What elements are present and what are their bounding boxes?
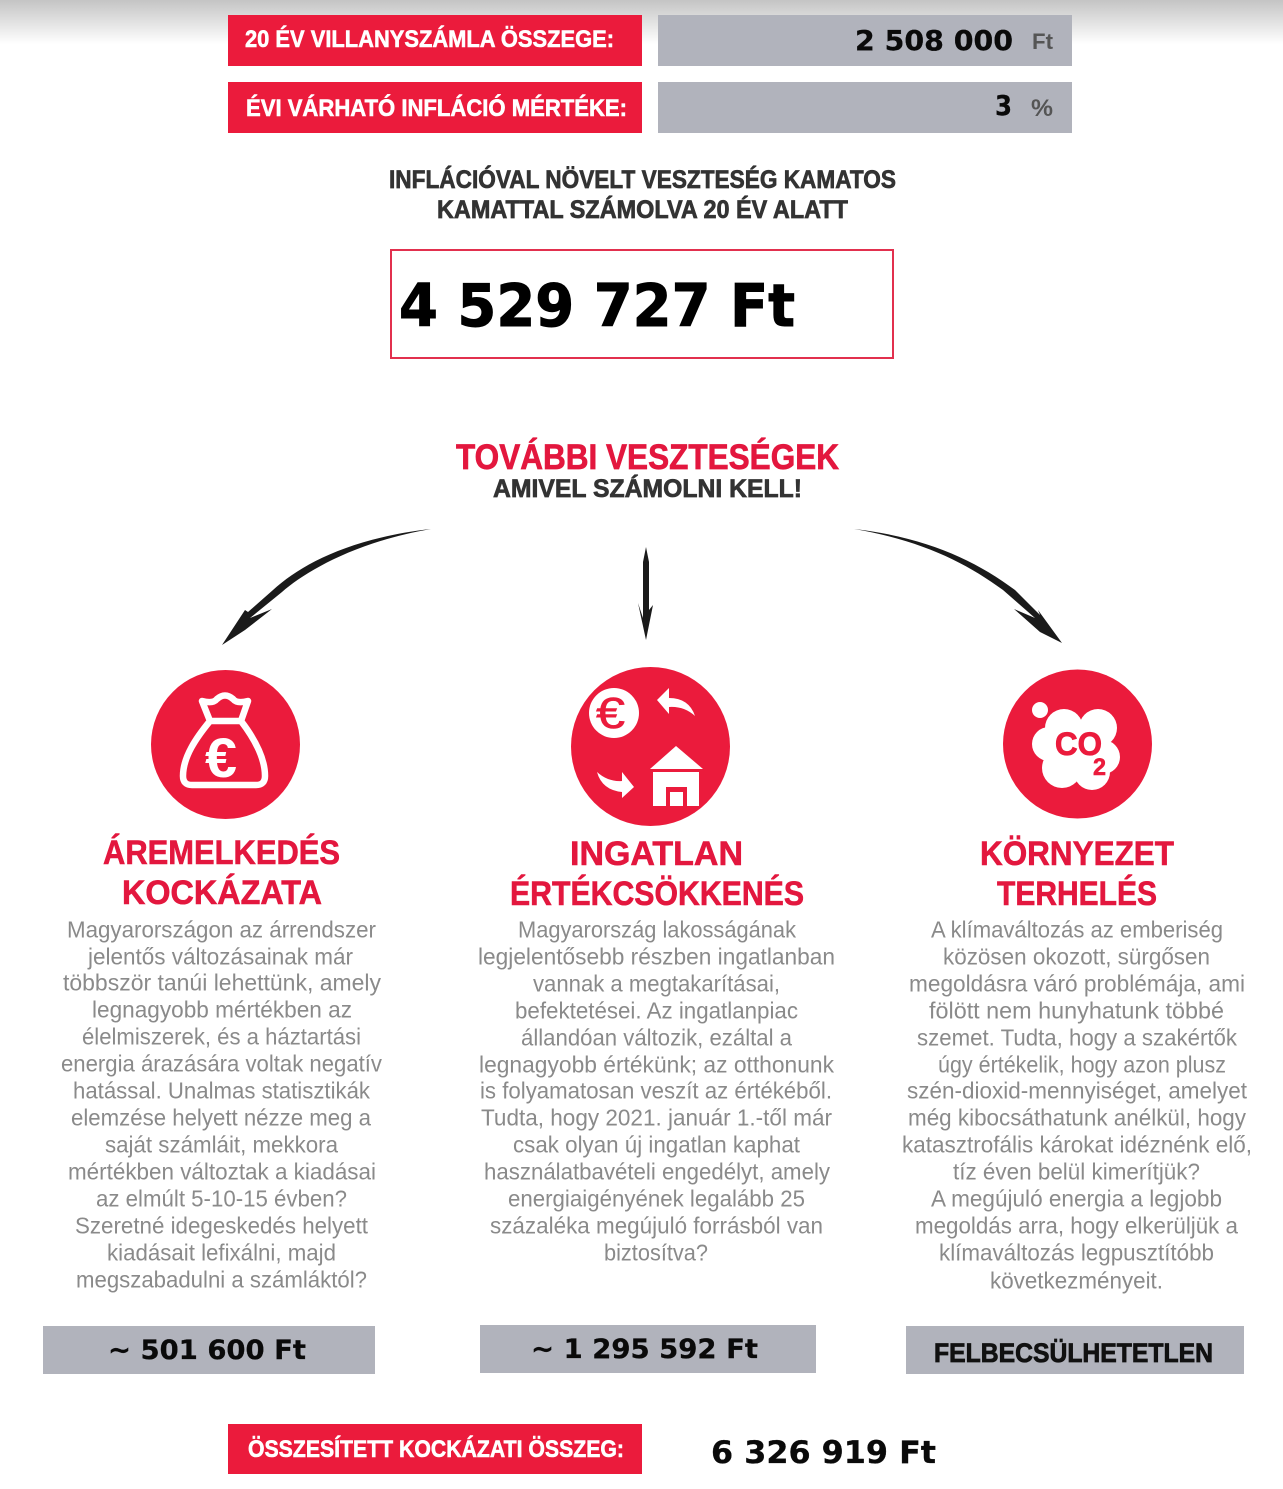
icon: money bag: € <box>205 726 237 789</box>
label: bill total: 20 ÉV VILLANYSZÁMLA ÖSSZEGE: <box>245 25 614 53</box>
heading: further losses <box>456 437 839 503</box>
heading: inflation-adjusted loss: KAMATTAL SZÁMOLVA 20 ÉV ALATT <box>437 195 848 224</box>
icon: property and euro exchange: € <box>596 689 625 738</box>
body text: saját számláit, mekkora <box>105 1132 339 1158</box>
value: inflation <box>658 82 1072 133</box>
body text: megoldás arra, hogy elkerüljük a <box>915 1212 1239 1238</box>
body text: katasztrofális károkat idéznénk elő, <box>902 1132 1252 1158</box>
row: 20 year electricity bill total <box>228 15 1072 66</box>
body text: energia árazására voltak negatív <box>61 1050 382 1076</box>
column: price rise risk <box>43 670 382 1374</box>
label: bill total <box>228 15 642 66</box>
arrow: centre <box>638 547 653 640</box>
body text: közösen okozott, sürgősen <box>943 944 1210 970</box>
value bar: ~ 501 600 Ft <box>108 1335 306 1366</box>
value bar: ~ 1 295 592 Ft <box>531 1334 758 1365</box>
body text: kiadásait lefixálni, majd <box>107 1240 336 1266</box>
column: environmental burden <box>902 670 1252 1374</box>
row: combined risk total <box>228 1424 936 1474</box>
body text: legnagyobb értékünk; az otthonunk <box>479 1052 834 1078</box>
value: bill total: 2 508 000 <box>855 24 1013 57</box>
value bar <box>43 1326 375 1374</box>
result box: total loss <box>391 250 893 358</box>
body text: Szeretné idegeskedés helyett <box>75 1212 368 1238</box>
body text: legjelentősebb részben ingatlanban <box>478 944 835 970</box>
icon: property and euro exchange <box>571 667 730 826</box>
arrow: left <box>222 529 431 645</box>
body text: úgy értékelik, hogy azon plusz <box>938 1052 1226 1078</box>
icon: CO2 cloud: CO <box>1055 726 1102 762</box>
body text: következményeit. <box>990 1268 1163 1294</box>
body text: is folyamatosan veszít az értékéből. <box>480 1078 832 1104</box>
icon: money bag <box>151 670 300 819</box>
body text: állandóan változik, ezáltal a <box>521 1024 793 1050</box>
label: inflation: ÉVI VÁRHATÓ INFLÁCIÓ MÉRTÉKE: <box>246 94 627 122</box>
body text: szén-dioxid-mennyiséget, amelyet <box>907 1078 1247 1104</box>
value: bill total: Ft <box>1032 29 1054 54</box>
arrow: right <box>854 529 1062 643</box>
body text: fölött nem hunyhatunk többé <box>929 998 1224 1024</box>
body text: megoldásra váró problémája, ami <box>909 970 1245 996</box>
value: inflation: % <box>1031 95 1053 122</box>
body text <box>902 916 1252 1294</box>
icon: CO2 cloud: 2 <box>1093 754 1106 781</box>
body text: Tudta, hogy 2021. január 1.-től már <box>481 1104 832 1130</box>
column: property value loss <box>478 667 835 1373</box>
body text: mértékben változtak a kiadásai <box>68 1158 376 1184</box>
value bar: FELBECSÜLHETETLEN <box>934 1338 1213 1368</box>
body text: százaléka megújuló forrásból van <box>490 1212 823 1238</box>
body text <box>61 916 382 1292</box>
body text: még kibocsáthatunk anélkül, hogy <box>908 1104 1246 1130</box>
heading: further losses: AMIVEL SZÁMOLNI KELL! <box>493 474 802 503</box>
label: combined risk: ÖSSZESÍTETT KOCKÁZATI ÖSSZEG: <box>248 1435 624 1463</box>
label: inflation <box>228 82 642 133</box>
value bar <box>906 1326 1244 1374</box>
result box: total loss: 4 529 727 Ft <box>399 271 795 340</box>
body text: legnagyobb mértékben az <box>92 996 352 1022</box>
body text: biztosítva? <box>604 1240 708 1266</box>
heading <box>980 835 1174 913</box>
value: inflation: 3 <box>995 89 1012 122</box>
value: bill total <box>658 15 1072 66</box>
heading: ÉRTÉKCSÖKKENÉS <box>510 875 804 913</box>
body text: szemet. Tudta, hogy a szakértők <box>917 1024 1237 1050</box>
body text: A megújuló energia a legjobb <box>931 1186 1222 1212</box>
body text: Magyarországon az árrendszer <box>67 916 376 942</box>
heading <box>103 834 340 912</box>
heading: TERHELÉS <box>997 875 1157 913</box>
heading: further losses: TOVÁBBI VESZTESÉGEK <box>456 437 839 477</box>
body text <box>478 916 835 1266</box>
heading: inflation-adjusted loss <box>389 164 896 224</box>
body text: klímaváltozás legpusztítóbb <box>939 1240 1214 1266</box>
body text: Magyarország lakosságának <box>518 916 796 942</box>
heading: KOCKÁZATA <box>122 874 322 912</box>
body text: A klímaváltozás az emberiség <box>931 916 1223 942</box>
body text: megszabadulni a számláktól? <box>76 1266 367 1292</box>
label: combined risk <box>228 1424 642 1474</box>
body text: az elmúlt 5-10-15 évben? <box>96 1186 347 1212</box>
body text: hatással. Unalmas statisztikák <box>73 1078 370 1104</box>
body text: használatbavételi engedélyt, amely <box>484 1158 830 1184</box>
body text: elemzése helyett nézze meg a <box>71 1104 372 1130</box>
body text: csak olyan új ingatlan kaphat <box>513 1132 800 1158</box>
body text: többször tanúi lehettünk, amely <box>63 970 381 996</box>
icon: CO2 cloud <box>1003 670 1152 818</box>
heading: ÁREMELKEDÉS <box>103 834 340 872</box>
body text: élelmiszerek, és a háztartási <box>82 1024 361 1050</box>
body text: jelentős változásainak már <box>87 944 353 970</box>
heading: KÖRNYEZET <box>980 835 1174 873</box>
heading: INGATLAN <box>570 835 743 873</box>
value bar <box>480 1325 816 1373</box>
row: expected yearly inflation <box>228 82 1072 133</box>
body text: energiaigényének legalább 25 <box>508 1186 805 1212</box>
heading <box>510 835 804 913</box>
body text: vannak a megtakarításai, <box>533 970 780 996</box>
heading: inflation-adjusted loss: INFLÁCIÓVAL NÖVELT VESZTESÉG KAMATOS <box>389 164 896 194</box>
value: combined risk: 6 326 919 Ft <box>711 1435 936 1471</box>
body text: befektetései. Az ingatlanpiac <box>515 998 798 1024</box>
body text: tíz éven belül kimerítjük? <box>953 1158 1200 1184</box>
